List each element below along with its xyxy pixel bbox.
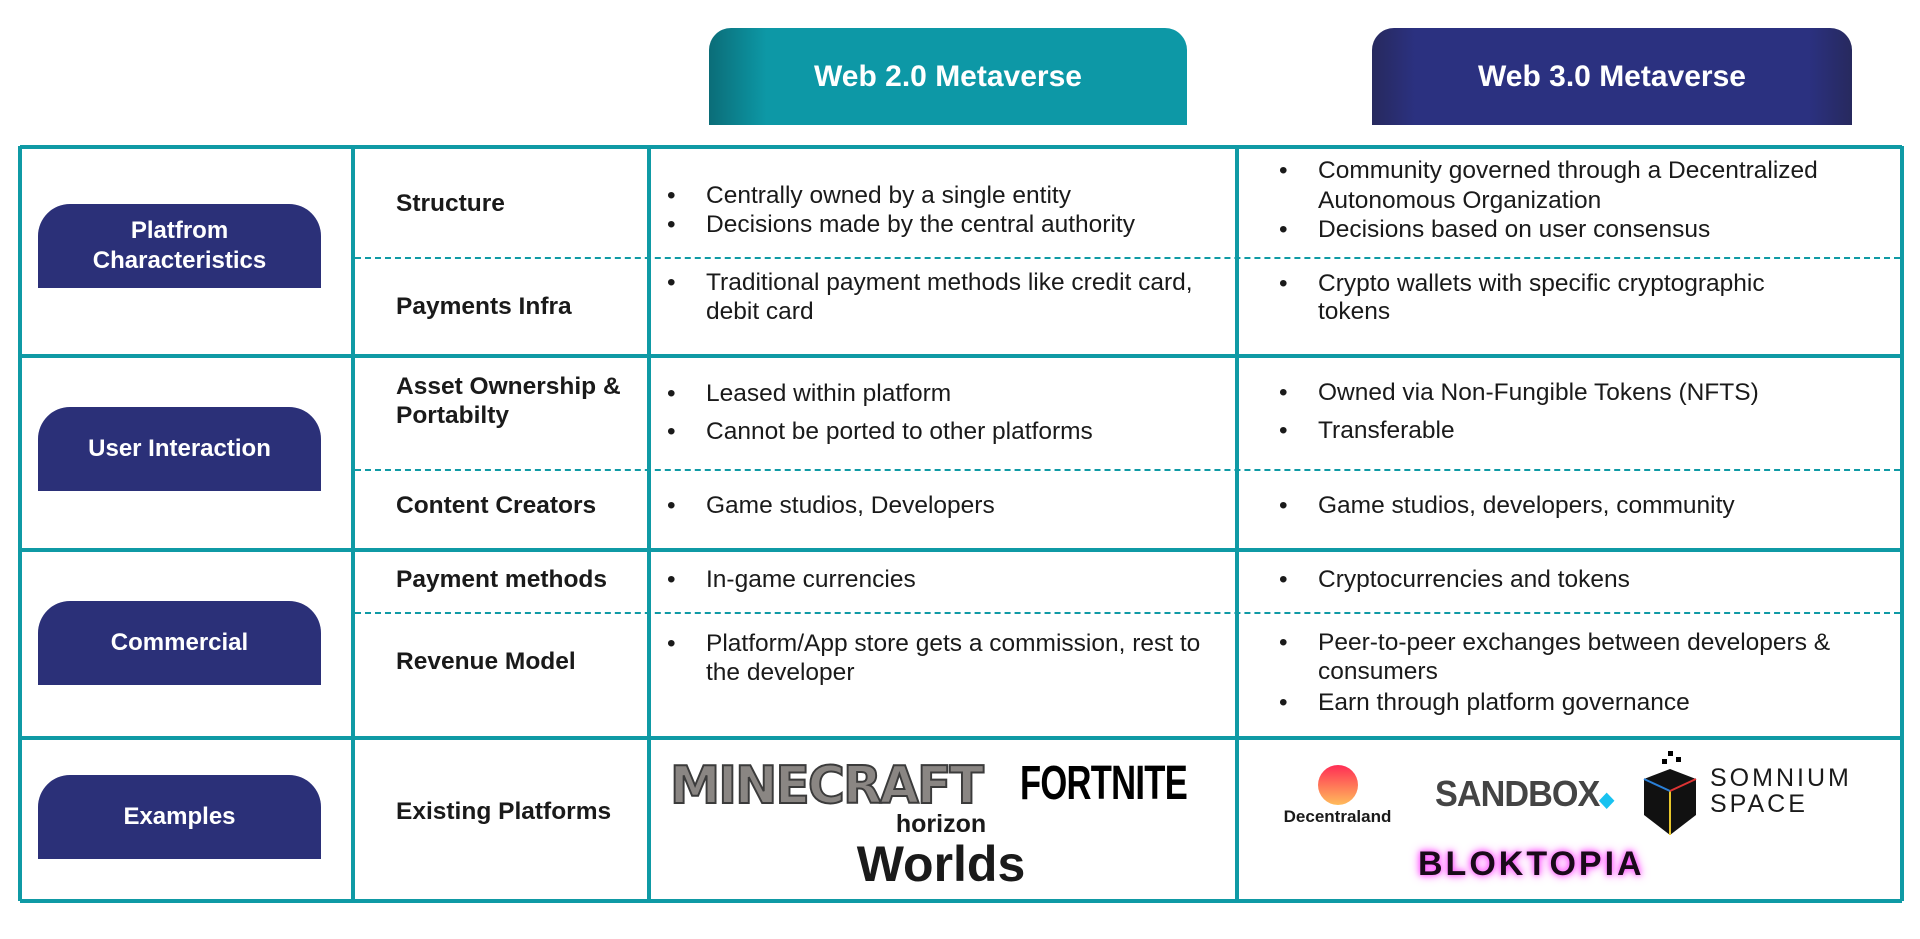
header: Web 2.0 Metaverse bbox=[709, 28, 1187, 125]
pill: Commercial bbox=[38, 601, 321, 685]
logo: Somnium Space bbox=[1644, 751, 1852, 835]
pill: Commercial: Commercial bbox=[111, 629, 248, 656]
logo: Decentraland bbox=[1284, 765, 1391, 826]
row: Asset Ownership: Leased within platform bbox=[706, 380, 951, 407]
row: Revenue Model: the developer bbox=[706, 659, 854, 686]
header: Web 3.0 Metaverse: Web 3.0 Metaverse bbox=[1478, 60, 1746, 92]
pill: Platform Characteristics bbox=[38, 204, 321, 288]
row: Structure: Community governed through a Decentralized bbox=[1318, 157, 1818, 184]
pill: Examples bbox=[38, 775, 321, 859]
row: Payments Infra bbox=[396, 269, 1765, 325]
pill: Platform Characteristics: Platfrom bbox=[131, 217, 228, 244]
row: Structure: Autonomous Organization bbox=[1318, 187, 1601, 214]
row: Payment methods bbox=[396, 566, 1630, 593]
logos: web 2.0 bbox=[670, 756, 1187, 892]
row: Payment methods: Cryptocurrencies and tokens bbox=[1318, 566, 1630, 593]
logos: web 3.0 bbox=[1284, 751, 1852, 883]
row: Asset Ownership: Portabilty bbox=[396, 402, 509, 429]
logo: Minecraft: MINECRAFT bbox=[670, 756, 982, 816]
row: Revenue Model: Revenue Model bbox=[396, 648, 576, 675]
row: Revenue Model: Earn through platform governance bbox=[1318, 689, 1690, 716]
logo: Bloktopia: BLOKTOPIA bbox=[1418, 845, 1645, 883]
pill: User Interaction: User Interaction bbox=[88, 435, 271, 462]
row: Payments Infra: Traditional payment methods like credit card, bbox=[706, 269, 1193, 296]
logo: Fortnite: FORTNITE bbox=[1020, 757, 1187, 810]
row: Payment methods: Payment methods bbox=[396, 566, 607, 593]
row: Revenue Model: Peer-to-peer exchanges between developers & bbox=[1318, 629, 1830, 656]
header: Web 3.0 Metaverse bbox=[1372, 28, 1852, 125]
row: Structure: Centrally owned by a single entity bbox=[706, 182, 1071, 209]
row: Payments Infra: Crypto wallets with specific cryptographic bbox=[1318, 270, 1765, 297]
pill: User Interaction bbox=[38, 407, 321, 491]
row: Content Creators: Game studios, Developers bbox=[706, 492, 995, 519]
logo: Somnium Space: SOMNIUM bbox=[1710, 764, 1852, 792]
row: Content Creators: Content Creators bbox=[396, 492, 596, 519]
row: Asset Ownership: Owned via Non-Fungible Tokens (NFTS) bbox=[1318, 379, 1759, 406]
logo: horizon Worlds bbox=[856, 810, 1025, 892]
row: Revenue Model: Platform/App store gets a commission, rest to bbox=[706, 630, 1200, 657]
logo: horizon Worlds: horizon bbox=[896, 810, 986, 838]
row: Asset Ownership: Asset Ownership & bbox=[396, 373, 621, 400]
row: Structure: Structure bbox=[396, 190, 505, 217]
row: Content Creators bbox=[396, 492, 1735, 519]
logo: The Sandbox: SANDBOX◆ bbox=[1435, 773, 1613, 814]
row: Payments Infra: debit card bbox=[706, 298, 814, 325]
row: Content Creators: Game studios, developers, community bbox=[1318, 492, 1735, 519]
logo: horizon Worlds: Worlds bbox=[857, 836, 1025, 892]
row: Payments Infra: Payments Infra bbox=[396, 293, 572, 320]
row: Structure: Decisions based on user consensus bbox=[1318, 216, 1710, 243]
row: Payment methods: In-game currencies bbox=[706, 566, 916, 593]
row: Structure: Decisions made by the central authority bbox=[706, 211, 1135, 238]
row: Asset Ownership: Transferable bbox=[1318, 417, 1455, 444]
logo: Somnium Space: SPACE bbox=[1710, 790, 1808, 818]
row: Payments Infra: tokens bbox=[1318, 298, 1390, 325]
row: Revenue Model: consumers bbox=[1318, 658, 1438, 685]
logo: Decentraland: Decentraland bbox=[1284, 807, 1391, 826]
header: Web 2.0 Metaverse: Web 2.0 Metaverse bbox=[814, 60, 1082, 92]
row: Asset Ownership bbox=[396, 373, 1759, 445]
pill: Examples: Examples bbox=[123, 803, 236, 830]
row label: Existing Platforms: Existing Platforms bbox=[396, 798, 611, 825]
row: Revenue Model bbox=[396, 629, 1830, 716]
row: Structure bbox=[396, 157, 1818, 243]
pill: Platform Characteristics: Characteristics bbox=[93, 247, 266, 274]
row: Asset Ownership: Cannot be ported to other platforms bbox=[706, 418, 1093, 445]
